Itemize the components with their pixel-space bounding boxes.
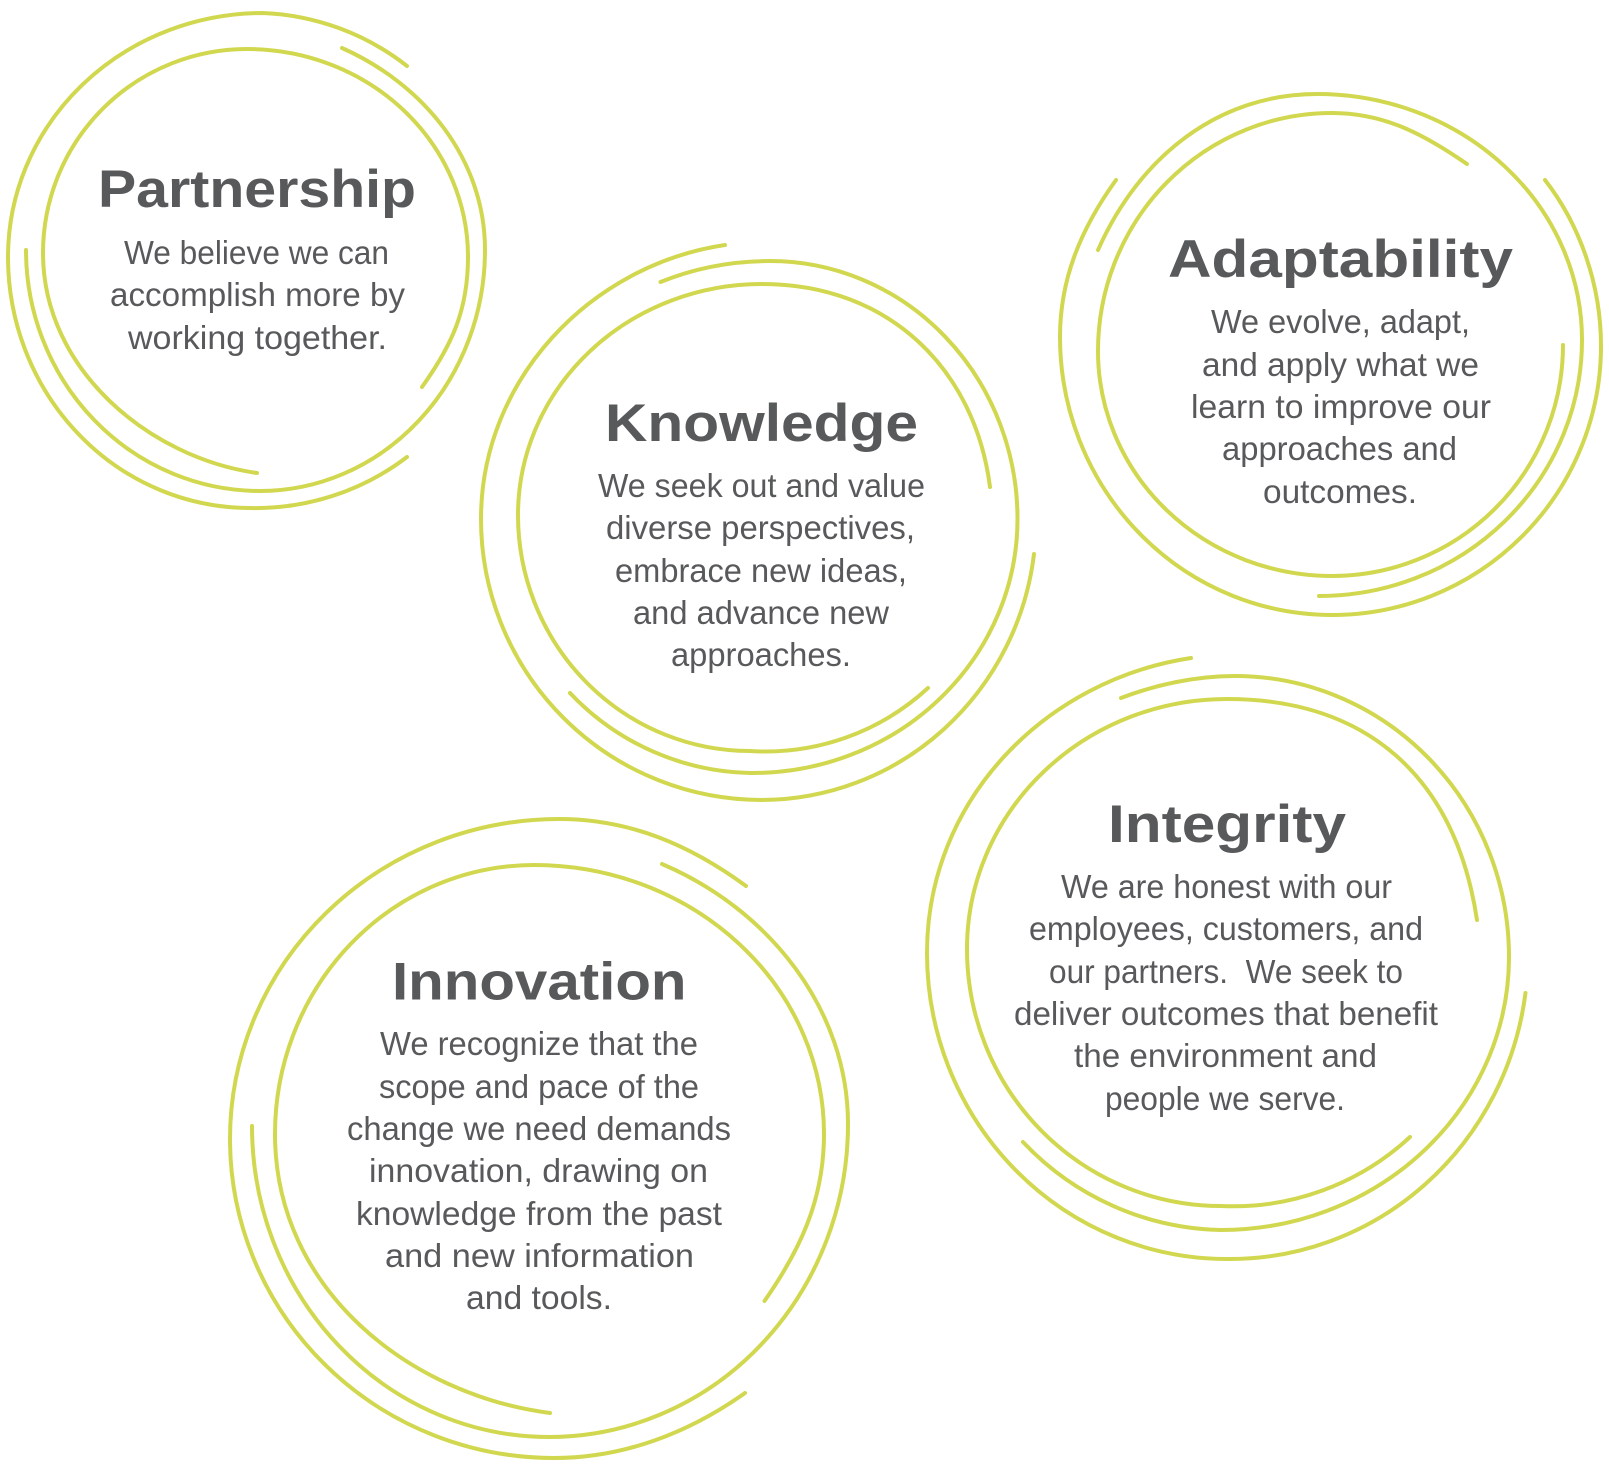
text block: Adaptability description: outcomes. [1263, 473, 1417, 510]
text block: Integrity description: our partners. We seek to [1049, 953, 1403, 990]
icon: Innovation spiral rings [230, 819, 848, 1458]
icon: Partnership spiral rings [8, 13, 485, 508]
text block: Innovation description: change we need demands [347, 1110, 731, 1147]
text block: Partnership description [110, 234, 405, 356]
text block: Innovation description: and new information [385, 1237, 694, 1274]
heading: Adaptability: Adaptability [1168, 230, 1514, 289]
heading: Knowledge: Knowledge [605, 394, 918, 453]
text block: Integrity description: deliver outcomes that benefit [1014, 995, 1438, 1032]
icon: Knowledge spiral rings [481, 245, 1034, 800]
icon: Integrity spiral rings [927, 658, 1526, 1259]
text block: Partnership description: accomplish more by [110, 276, 405, 313]
text block: Innovation description: innovation, drawing on [369, 1152, 708, 1189]
text block: Adaptability description: learn to improve our [1191, 388, 1491, 425]
heading: Partnership: Partnership [98, 160, 416, 219]
text block: Innovation description: and tools. [466, 1279, 612, 1316]
text block: Integrity description: people we serve. [1105, 1080, 1345, 1117]
heading: Innovation: Innovation [392, 952, 686, 1012]
heading: Integrity: Integrity [1108, 795, 1347, 854]
text block: Partnership description: working together. [127, 319, 387, 356]
text block: Innovation description [347, 1025, 731, 1316]
text block: Innovation description: knowledge from the past [356, 1195, 722, 1232]
text block: Integrity description [1014, 868, 1438, 1117]
panel: Knowledge [481, 245, 1034, 800]
text block: Knowledge description [598, 467, 925, 673]
text block: Adaptability description: approaches and [1222, 430, 1457, 467]
text block: Knowledge description: embrace new ideas, [615, 552, 907, 589]
text block: Knowledge description: We seek out and value [598, 467, 925, 504]
text block: Partnership description: We believe we can [124, 234, 389, 271]
text block: Innovation description: scope and pace of the [379, 1068, 699, 1105]
text block: Knowledge description: and advance new [633, 594, 889, 631]
text block: Knowledge description: diverse perspectives, [606, 509, 915, 546]
text block: Adaptability description [1191, 303, 1491, 510]
text block: Knowledge description: approaches. [671, 636, 851, 673]
text block: Integrity description: employees, customers, and [1029, 910, 1423, 947]
text block: Integrity description: the environment and [1074, 1037, 1377, 1074]
text block: Integrity description: We are honest with our [1061, 868, 1392, 905]
text block: Adaptability description: We evolve, adapt, [1211, 303, 1470, 340]
panel: Integrity [927, 658, 1526, 1259]
panel: Innovation [230, 819, 848, 1458]
icon: Adaptability spiral rings [1060, 94, 1601, 615]
panel: Adaptability [1060, 94, 1601, 615]
panel: Partnership [8, 13, 485, 508]
text block: Adaptability description: and apply what we [1202, 346, 1479, 383]
text block: Innovation description: We recognize that the [380, 1025, 698, 1062]
